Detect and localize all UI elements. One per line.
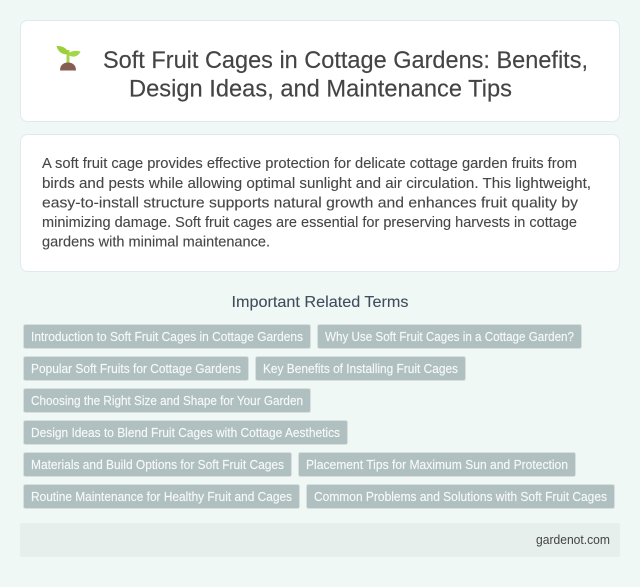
- tag: size and shape: [24, 388, 310, 412]
- title: Design Ideas, and Maintenance Tips: [129, 76, 512, 102]
- tag: common problems: Common Problems and Solutions with Soft Fruit Cages: [314, 490, 607, 504]
- tag: size and shape: Choosing the Right Size and Shape for Your Garden: [31, 394, 303, 408]
- tag: routine maintenance: Routine Maintenance for Healthy Fruit and Cages: [31, 490, 292, 504]
- footer: [20, 523, 620, 557]
- tag: placement: [298, 452, 576, 476]
- text block: introduction: gardens with minimal maintenance.: [42, 234, 270, 250]
- text block: introduction: minimizing damage. Soft fruit cages are essential for preserving harvests in cottage: [42, 214, 577, 231]
- tag: placement: Placement Tips for Maximum Sun and Protection: [306, 458, 568, 472]
- panel: introduction: [20, 134, 620, 272]
- tag: popular soft fruits: Popular Soft Fruits for Cottage Gardens: [31, 362, 241, 376]
- tag: materials: Materials and Build Options for Soft Fruit Cages: [31, 458, 284, 472]
- tag: popular soft fruits: [24, 356, 248, 380]
- tag: design ideas: [24, 420, 348, 444]
- text block: introduction: easy-to-install structure supports natural growth and enhances fruit quality by: [42, 194, 579, 212]
- heading: important related terms: Important Related Terms: [232, 294, 408, 311]
- footer source: gardenot.com: [536, 532, 610, 547]
- tag: introduction: Introduction to Soft Fruit Cages in Cottage Gardens: [31, 330, 303, 344]
- tag: introduction: [24, 324, 310, 348]
- tag: why use: [318, 324, 582, 348]
- tag: common problems: [306, 484, 614, 508]
- text block: introduction: birds and pests while allowing optimal sunlight and air circulation. This lightweight,: [42, 175, 591, 192]
- title: Soft Fruit Cages in Cottage Gardens: Benefits,: [103, 47, 588, 74]
- tag: key benefits: Key Benefits of Installing Fruit Cages: [263, 362, 458, 376]
- icon: seedling: [56, 46, 80, 70]
- tag: design ideas: Design Ideas to Blend Fruit Cages with Cottage Aesthetics: [31, 426, 340, 440]
- panel: title header: [20, 20, 620, 122]
- tag: key benefits: [256, 356, 466, 380]
- tag: routine maintenance: [24, 484, 300, 508]
- tag: why use: Why Use Soft Fruit Cages in a Cottage Garden?: [325, 330, 574, 344]
- tag: materials: [24, 452, 292, 476]
- text block: introduction: A soft fruit cage provides effective protection for delicate cottage garden fruits from: [42, 155, 577, 172]
